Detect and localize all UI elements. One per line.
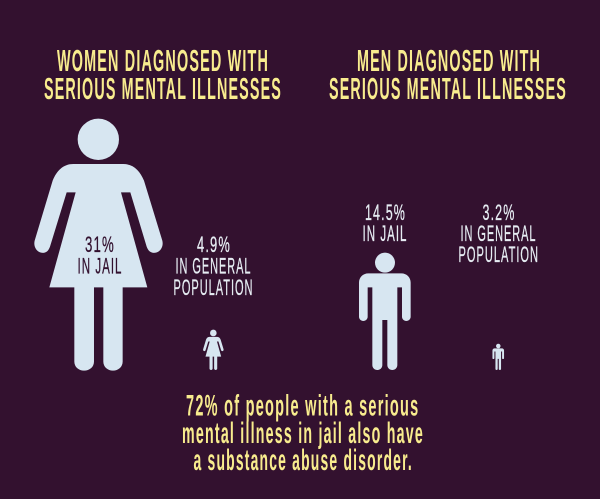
label: 14.5% in jail: IN JAIL — [362, 221, 408, 246]
label: 4.9% in general population — [174, 232, 254, 300]
text: WOMEN DIAGNOSED WITH — [57, 43, 269, 78]
label: 3.2% in general population — [458, 200, 539, 267]
icon: small man, general population — [492, 344, 504, 370]
heading: women — [44, 43, 282, 106]
icon: small woman, general population — [203, 330, 224, 370]
label: 14.5% in jail: 14.5% — [365, 200, 406, 225]
callout: substance abuse statistic — [182, 390, 424, 477]
icon: large woman, in jail — [34, 119, 163, 371]
icon: large man, in jail — [359, 253, 411, 370]
text: POPULATION — [174, 275, 254, 300]
text: IN GENERAL — [176, 254, 252, 278]
heading: men — [329, 43, 567, 106]
label: 3.2% in general population: 3.2% — [482, 200, 516, 225]
label: 4.9% in general population: 4.9% — [197, 232, 231, 257]
label: 31% in jail — [78, 232, 122, 278]
label: 31% in jail: 31% — [85, 232, 115, 257]
text: SERIOUS MENTAL ILLNESSES — [44, 71, 282, 106]
label: 14.5% in jail — [362, 200, 408, 246]
label: 31% in jail: IN JAIL — [78, 254, 122, 278]
